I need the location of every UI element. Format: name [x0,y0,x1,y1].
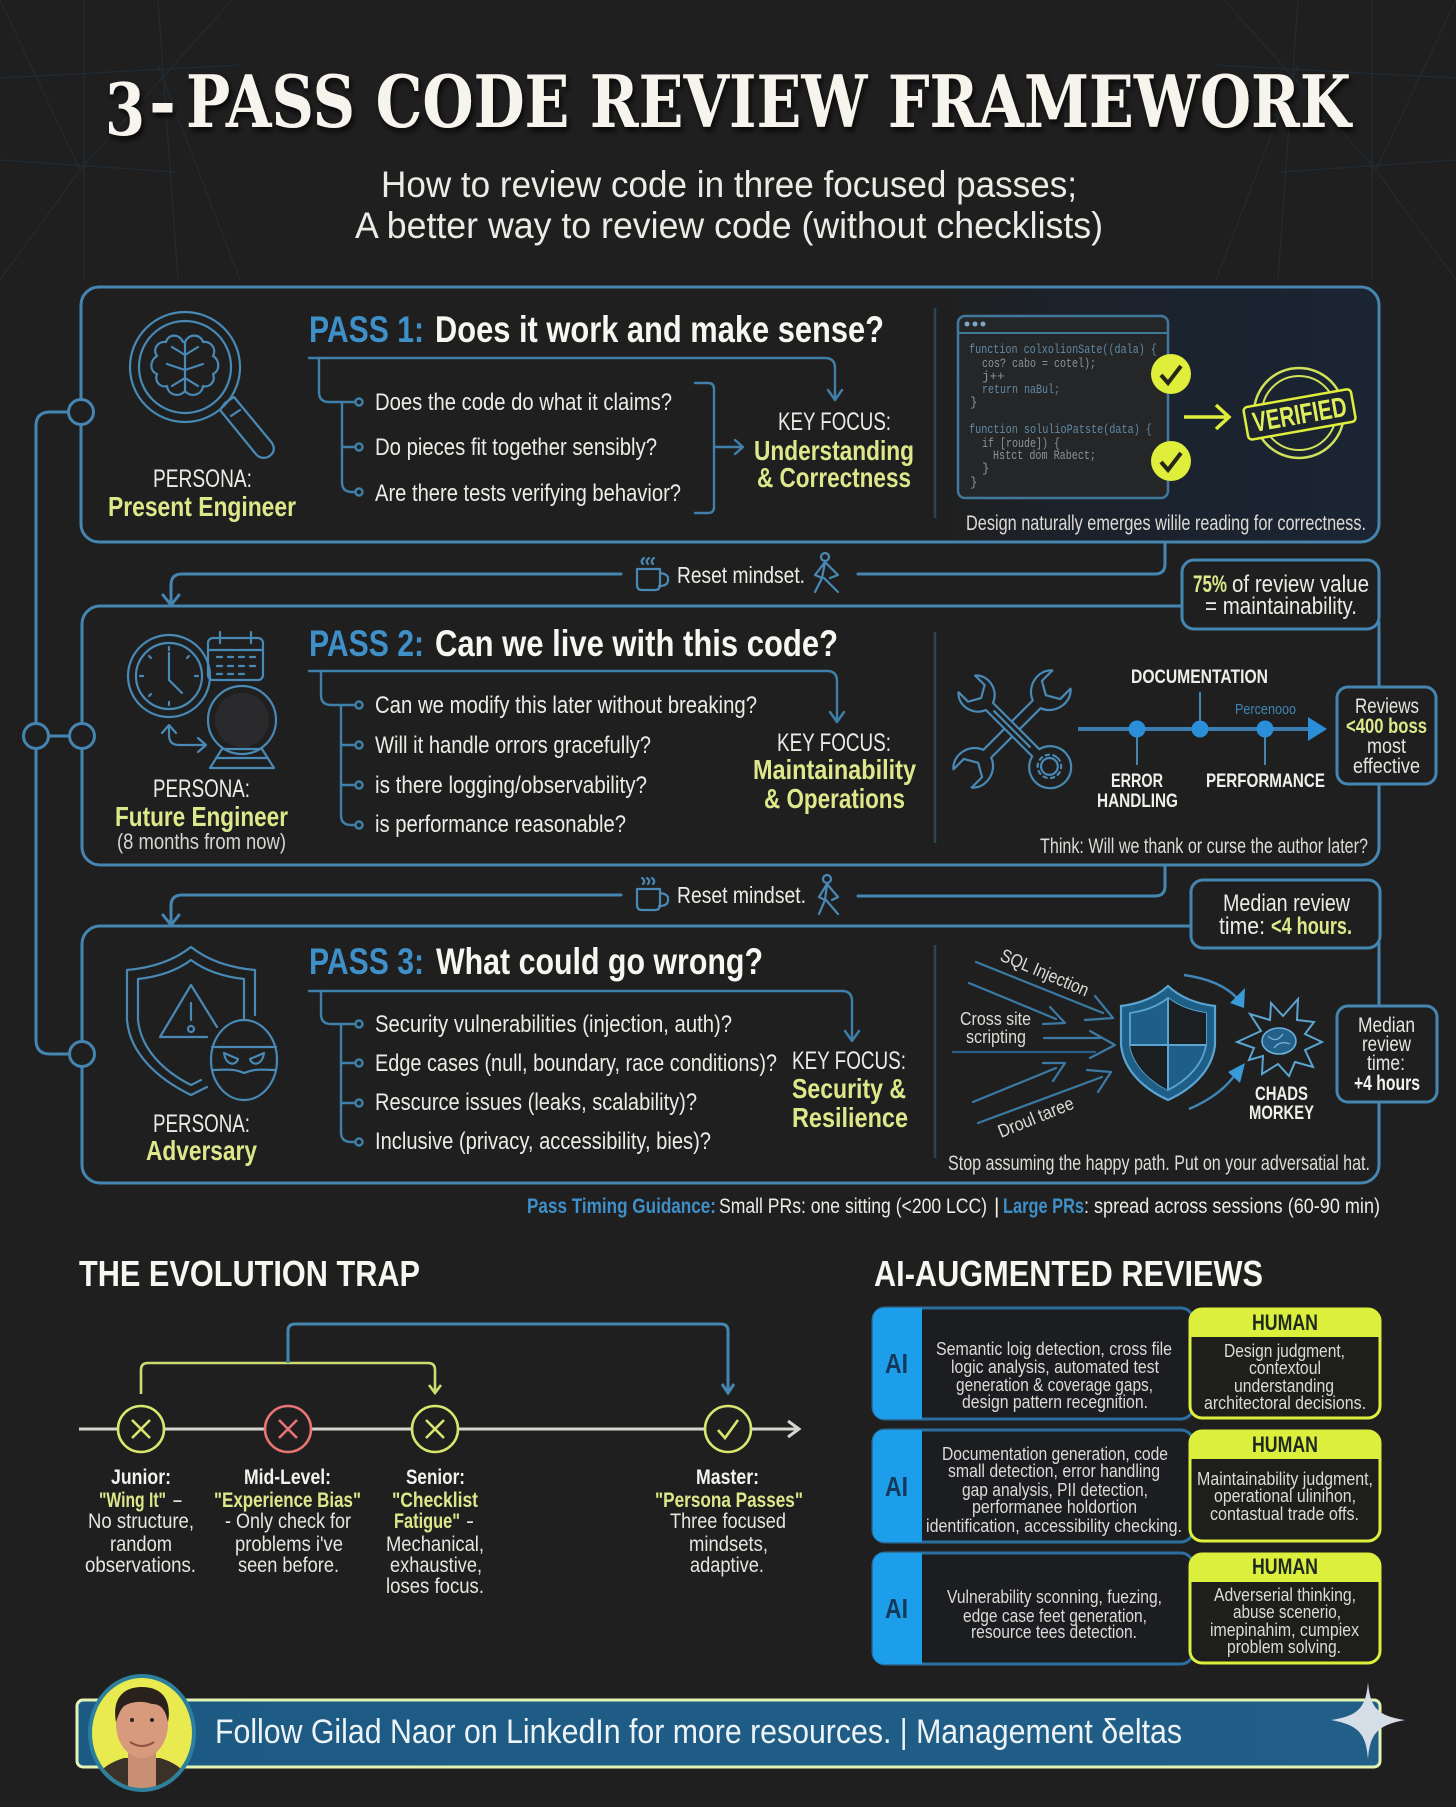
key focus: Security & [792,1073,906,1104]
questions: Rescurce issues (leaks, scalability)? [375,1089,697,1116]
section: the evolution trap [79,1253,803,1598]
row 2: contastual trade offs. [1210,1503,1359,1524]
panel: pass 2 [82,606,1379,865]
heading: THE EVOLUTION TRAP [79,1253,420,1294]
title: - [149,59,176,144]
subtitle: A better way to review code (without checklists) [355,205,1103,246]
stage text: junior: observations. [85,1554,196,1577]
stage text: junior: No structure, [88,1510,194,1533]
icon: coffee cup [637,878,668,910]
icon: coffee cup [637,558,668,590]
callout: reviews under 400: <400 boss [1346,715,1427,738]
panel: pass 3 [82,926,1379,1183]
icon: walker [819,875,838,914]
row 3: AI [885,1593,908,1624]
icon: clock calendar crystal ball [128,632,276,768]
questions: Inclusive (privacy, accessibility, bies)? [375,1128,711,1155]
pass timing guidance: | [994,1195,999,1218]
questions: Does the code do what it claims? [375,389,672,416]
questions: Are there tests verifying behavior? [375,480,681,507]
avatar [90,1676,194,1790]
row 1: logic analysis, automated test [951,1356,1159,1377]
questions: Will it handle orrors gracefully? [375,732,651,759]
reset mindset connector 1 [163,543,1165,605]
pass timing guidance: Small PRs: one sitting (<200 LCC) [719,1195,987,1218]
key focus [753,729,916,814]
code window: return naBul; [982,383,1060,397]
subtitle: How to review code in three focused passes; [381,164,1077,205]
heading [309,623,838,664]
key focus: Maintainability [753,754,916,785]
row 1: architectoral decisions. [1204,1392,1366,1413]
stage marker: senior [412,1406,458,1452]
row 1: generation & coverage gaps, [956,1374,1153,1395]
pass timing guidance: Pass Timing Guidance: [527,1195,716,1218]
questions: Edge cases (null, boundary, race conditions)? [375,1050,777,1077]
stage marker: master [705,1406,751,1452]
stage text: junior: Junior: [111,1466,171,1489]
blue bracket arrow [288,1324,734,1393]
heading: What could go wrong? [436,941,763,982]
persona label [146,1110,257,1166]
callout: median review under 4 hours [1191,880,1380,948]
section: ai-augmented reviews [873,1253,1380,1664]
stage text: master: adaptive. [690,1554,764,1577]
icon: burst [1237,999,1322,1076]
callout: median review under 4 hours: time: [1219,913,1265,940]
attack labels: scripting [966,1026,1026,1047]
stage text: master: mindsets, [689,1533,768,1556]
code window: Hstct dom Rabect; [993,449,1096,463]
reset mindset connector 1: Reset mindset. [677,562,805,588]
bracket arrow to key focus [695,383,743,513]
lime bracket arrow [141,1363,441,1394]
heading: PASS 2: [309,623,424,664]
stage text: mid-level: problems i've [235,1533,343,1556]
icon: shield [1121,986,1215,1100]
icon: check 1 [1151,354,1191,394]
curved deflection arrows [1184,975,1245,1109]
callout: 75% maintainability: 75% [1193,571,1227,598]
row 3: HUMAN [1252,1554,1318,1579]
stage text: mid-level: seen before. [238,1554,339,1577]
stage text: mid-level [214,1466,361,1577]
stage text: senior: Senior: [406,1466,465,1489]
stage text: mid-level: "Experience Bias" [214,1489,361,1512]
row 3 [873,1553,1380,1664]
burst label: CHADS [1255,1084,1308,1105]
icon: shield and masked adversary [127,947,277,1100]
key focus: Resilience [792,1102,908,1133]
stage text: junior: random [110,1533,172,1556]
callout: reviews under 400 [1337,687,1436,784]
code window: function solulioPatste(data) { [969,423,1152,437]
icon: sparkle star [1331,1682,1405,1759]
icon: check 2 [1151,441,1191,481]
attack labels: Cross site [960,1008,1031,1029]
question tree connector [309,671,844,828]
questions: is there logging/observability? [375,772,647,799]
row 1: Semantic loig detection, cross file [936,1338,1172,1359]
heading [309,941,763,982]
callout: reviews under 400: most [1367,735,1406,758]
persona label: Future Engineer [115,801,288,832]
questions [375,1011,777,1155]
attack labels: Droul taree [995,1092,1077,1142]
row 2: operational ulinihon, [1214,1485,1356,1506]
row 2: identification, accessibility checking. [926,1515,1182,1536]
row 1: Design judgment, [1224,1340,1345,1361]
persona label: Adversary [146,1135,257,1166]
stage text: mid-level: Mid-Level: [244,1466,331,1489]
row 1: HUMAN [1252,1310,1318,1335]
burst label [1249,1084,1314,1124]
footer text: Follow Gilad Naor on LinkedIn for more resources. | Management δeltas [215,1713,1182,1751]
persona label: PERSONA: [153,1110,250,1138]
stage text: junior [85,1466,196,1577]
row 1: contextoul [1249,1357,1321,1378]
pass timing guidance [527,1195,1380,1218]
stage text: master: "Persona Passes" [655,1489,803,1512]
verified stamp: VERIFIED [1250,391,1349,438]
callout: median review plus 4 hours: time: [1367,1052,1405,1075]
stage text: senior [386,1466,484,1598]
stage text: senior: "Checklist [392,1489,478,1512]
key focus: Understanding [754,435,914,466]
key focus: & Correctness [757,462,911,493]
attack labels: SQL Injection [997,944,1092,1000]
row 2: Documentation generation, code [942,1443,1168,1464]
code window: cos? cabo = cotel); [982,357,1096,371]
callout: reviews under 400: Reviews [1355,695,1419,718]
row 3: abuse scenerio, [1233,1601,1341,1622]
stage text: senior: exhaustive, [390,1554,482,1577]
row 3: Adverserial thinking, [1214,1584,1356,1605]
question tree connector [309,991,859,1146]
row 2: AI [885,1471,908,1502]
row 3: edge case feet generation, [963,1605,1147,1626]
key focus [792,1047,908,1133]
stage text: senior: Fatigue" [394,1510,460,1533]
callout: 75% maintainability: = maintainability. [1205,593,1357,620]
questions [375,692,757,838]
stage text: junior: - [172,1489,183,1512]
panel: pass 1 [81,287,1379,542]
row 2 [873,1430,1380,1542]
heading: PASS 3: [309,941,424,982]
callout: median review plus 4 hours: Median [1358,1014,1415,1037]
code window: function colxolionSate((dala) { [969,343,1157,357]
stage text: senior: Mechanical, [386,1533,484,1556]
timeline chart: PERFORMANCE [1206,771,1325,792]
row 3: resource tees detection. [971,1621,1137,1642]
code window: } [970,476,978,490]
row 3: Vulnerability sconning, fuezing, [947,1586,1162,1607]
stage text: master: Three focused [670,1510,786,1533]
callout: median review under 4 hours: Median review [1223,890,1351,917]
row 2: small detection, error handling [948,1460,1160,1481]
attack labels [960,944,1092,1142]
stage text: senior: - [466,1510,474,1533]
timeline chart: Percenooo [1235,701,1296,718]
persona label: PERSONA: [153,775,250,803]
timeline chart [1078,667,1327,812]
row 3: imepinahim, cumpiex [1210,1619,1360,1640]
heading: Does it work and make sense? [435,309,884,350]
code window: } [982,462,990,476]
caption: Think: Will we thank or curse the author later? [1040,835,1368,858]
reset mindset connector 2 [163,866,1165,925]
questions: Do pieces fit together sensibly? [375,434,657,461]
persona label: (8 months from now) [117,829,286,854]
code window: if [roude]) { [982,437,1060,451]
persona label: PERSONA: [153,465,252,493]
stage text: master [655,1466,803,1577]
questions: Can we modify this later without breaking? [375,692,757,719]
subtitle [355,164,1103,246]
icon: brain magnifier [130,312,274,458]
heading: AI-AUGMENTED REVIEWS [874,1253,1263,1294]
burst label: MORKEY [1249,1103,1314,1124]
persona label: Present Engineer [108,491,296,522]
row 3: problem solving. [1227,1636,1341,1657]
stage text: junior: "Wing It" [99,1489,166,1512]
question tree connector [309,358,842,496]
key focus [754,408,914,493]
timeline axis [79,1421,799,1437]
pass timing guidance: Large PRs [1003,1195,1084,1218]
persona label [115,775,288,854]
code window: j++ [982,370,1005,384]
arrow to stamp [1184,405,1229,429]
key focus: KEY FOCUS: [777,729,891,757]
row 1: design pattern recegnition. [962,1391,1148,1412]
key focus: & Operations [764,783,905,814]
row 2: HUMAN [1252,1432,1318,1457]
callout: median review plus 4 hours: review [1362,1033,1412,1056]
icon: walker [815,553,838,592]
persona label [108,465,296,522]
stage marker: mid-level [265,1406,311,1452]
timeline chart: DOCUMENTATION [1131,667,1268,688]
code window [958,316,1168,498]
row 1 [873,1308,1380,1419]
heading: Can we live with this code? [435,623,838,664]
pass timing guidance: : spread across sessions (60-90 min) [1084,1195,1380,1218]
row 2: performanee holdortion [972,1496,1137,1517]
stage text: master: Master: [696,1466,759,1489]
callout: median review plus 4 hours [1337,1006,1437,1102]
heading [309,309,884,350]
timeline chart: ERROR [1111,771,1163,792]
title: 3 [105,67,145,152]
code window: } [970,396,978,410]
row 2: Maintainability judgment, [1197,1468,1373,1489]
row 2: gap analysis, PII detection, [962,1479,1148,1500]
callout: 75% maintainability [1182,560,1379,629]
key focus: KEY FOCUS: [792,1047,906,1075]
icon: crossed wrenches [949,666,1080,797]
questions: is performance reasonable? [375,811,626,838]
timeline chart: HANDLING [1097,791,1178,812]
row 1: AI [885,1348,908,1379]
stage text: senior: loses focus. [386,1575,484,1598]
rail connector [24,400,94,1066]
stage marker: junior [118,1406,164,1452]
stage text: mid-level: - Only check for [225,1510,351,1533]
attack arrows [953,962,1115,1123]
row 1: understanding [1234,1375,1334,1396]
callout: reviews under 400: effective [1353,755,1420,778]
questions [375,389,681,507]
key focus: KEY FOCUS: [778,408,891,436]
reset mindset connector 2: Reset mindset. [677,882,806,908]
questions: Security vulnerabilities (injection, auth)? [375,1011,732,1038]
callout: median review plus 4 hours: +4 hours [1354,1072,1420,1095]
callout: median review under 4 hours: <4 hours. [1271,913,1352,940]
footer banner [77,1676,1405,1790]
callout: 75% maintainability: of review value [1232,571,1369,598]
verified stamp [1243,368,1356,458]
heading: PASS 1: [309,309,424,350]
